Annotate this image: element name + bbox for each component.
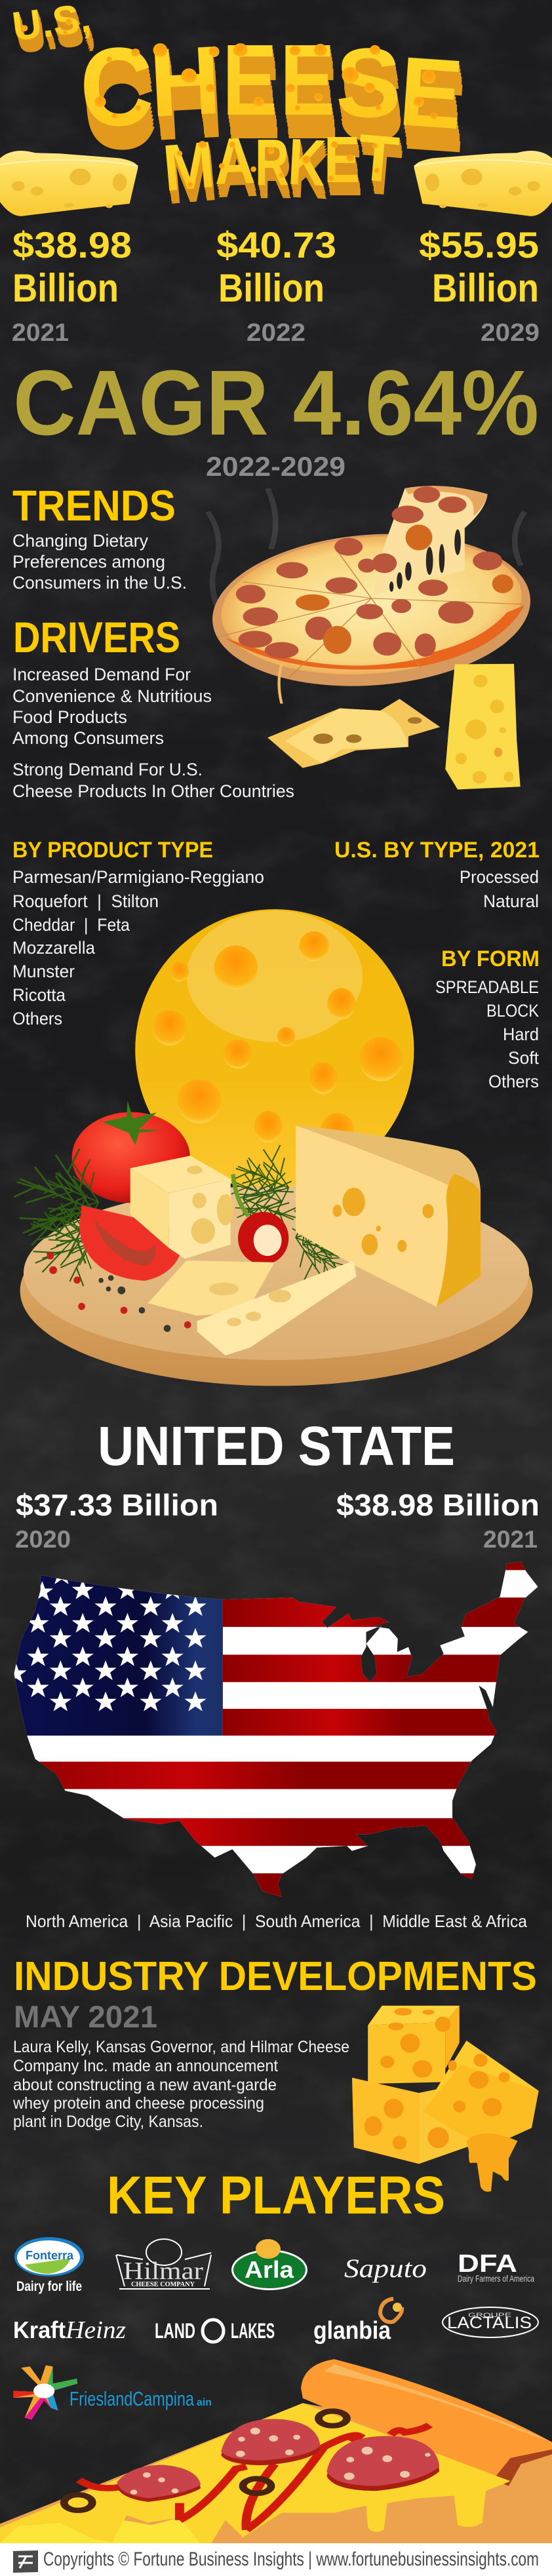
peppercorns [47,1253,191,1332]
panel: by form: SPREADABLE [435,977,539,997]
stat: U.S. 2020 [15,1488,218,1553]
illustration: cheese board [14,909,532,1386]
logo: glanbia: glanbia [313,2317,391,2345]
panel: by product type: Roquefort | Stilton [12,891,159,911]
title line: MARKET: K [286,125,328,200]
logo: Saputo: Saputo [344,2254,427,2283]
olives [64,2411,347,2510]
top cube [368,2006,460,2084]
cheese wedge large [296,1125,481,1307]
panel: by form [435,946,540,1091]
red sauce drizzle [79,2425,429,2530]
panel: industry developments: INDUSTRY DEVELOPMENTS [14,1954,537,1999]
panel: by form: Hard [503,1025,539,1044]
title line: MARKET: M [160,128,218,205]
stat: U.S. 2021: 2021 [483,1526,538,1553]
panel: industry developments: plant in Dodge City, Kansas. [13,2113,203,2131]
icon: cheese wedge right [414,151,552,216]
panel: trends: TRENDS [12,481,176,530]
logo: FrieslandCampina: FrieslandCampina [69,2387,195,2410]
tilted cube [422,2040,539,2149]
panel: by product type: Ricotta [12,985,66,1005]
logo: DFA [458,2250,534,2284]
steam [208,488,524,617]
title line: MARKET: R [255,126,289,199]
panel: by product type: Munster [12,962,75,981]
footer [0,2543,552,2576]
heading: key players: KEY PLAYERS [107,2166,445,2225]
logo: KraftHeinz: Heinz [65,2316,126,2344]
stat: 2021 market size: $38.98 [12,224,132,265]
logo: Land O Lakes [155,2319,275,2343]
panel: drivers: DRIVERS [13,613,180,661]
title line: CHEESE: H [147,26,224,138]
cheese slices on board [148,1260,356,1356]
panel: by product type: Parmesan/Parmigiano-Reggiano [12,867,264,887]
logo: Hilmar Cheese Company: Hilmar [123,2257,203,2285]
logo: FrieslandCampina: ain [197,2397,212,2408]
logo: Land O Lakes: LAND [155,2319,195,2343]
cheese cube [130,1156,234,1259]
panel: by product type: BY PRODUCT TYPE [12,838,213,863]
title line: CHEESE: E [222,24,277,136]
stat: 2029 market size: 2029 [481,319,540,347]
logo: Arla [231,2239,307,2290]
icon: Fortune Business Insights logo [13,2550,38,2573]
panel: drivers [12,613,294,801]
logo: Fonterra [14,2237,84,2294]
stat: U.S. 2020: $37.33 Billion [16,1488,218,1522]
stat: U.S. 2021 [336,1488,540,1553]
melted cheese [0,2403,511,2543]
panel: U.S. by type 2021 [334,838,540,911]
logo: Lactalis: LACTALIS [447,2314,532,2332]
stat: 2029 market size [419,224,540,347]
tomato [72,1101,190,1203]
tomato wedge [79,1205,185,1281]
panel: by product type: Others [12,1009,62,1028]
regions list: North America | Asia Pacific | South America | Middle East & Africa [26,1911,528,1931]
wheel of cheese [135,909,414,1190]
panel: drivers: Increased Demand For [12,665,191,684]
logo: FrieslandCampina [13,2366,212,2419]
map: United States flag [0,1557,552,1904]
logo: DFA: DFA [458,2250,517,2278]
logo: KraftHeinz [13,2316,126,2344]
logo: Land O Lakes: LAKES [231,2319,275,2343]
bottom cube [352,2078,472,2164]
title line: MARKET [160,121,402,205]
panel: by product type: Cheddar | Feta [12,915,130,935]
salami slices [117,2419,439,2502]
pizza crust edge [301,2359,552,2486]
wooden board [20,1186,532,1386]
stat: 2022 market size: 2022 [246,319,306,347]
stat: U.S. 2021: $38.98 Billion [336,1488,540,1522]
panel: trends: Changing Dietary [12,531,148,551]
panel: trends: Consumers in the U.S. [12,573,187,593]
icon: cheese block [445,664,521,789]
icon: cheese slices [267,699,440,768]
pepperoni [236,486,513,659]
panel: drivers: Strong Demand For U.S. [12,760,203,779]
panel: by product type: Mozzarella [12,938,96,958]
illustration: pizza with cheese pull [194,486,549,703]
pizza base [194,518,549,702]
panel: by form: Soft [508,1048,539,1068]
panel: industry developments: whey protein and cheese processing [12,2094,264,2113]
title line: MARKET: E [324,123,360,197]
panel: trends: Preferences among [12,552,165,572]
title line: MARKET: A [213,124,256,199]
lifted slice [373,486,488,596]
panel: industry developments: Laura Kelly, Kansas Governor, and Hilmar Cheese [13,2038,349,2056]
panel: by form: BLOCK [486,1001,539,1021]
title line: CHEESE: S [336,28,401,138]
panel: industry developments: Company Inc. made an announcement [13,2057,278,2075]
stat: 2022 market size: $40.73 [216,224,336,265]
panel: U.S. by type 2021: Processed [460,867,539,887]
panel: industry developments: about constructing a new avant-garde [13,2076,277,2094]
logo: Fonterra: Fonterra [26,2249,74,2262]
panel: by form: Others [488,1072,539,1091]
CAGR headline: 2022-2029 [206,451,345,482]
title line: MARKET: T [355,121,402,197]
cheese holes on title letters [22,19,437,187]
stat: 2021 market size: 2021 [12,319,69,347]
panel: drivers: Cheese Products In Other Countries [12,781,294,801]
title: U.S. Cheese Market [10,0,466,205]
logo: glanbia [313,2299,402,2345]
logo: Arla: Arla [245,2256,294,2283]
stat: 2022 market size [216,224,336,347]
illustration: pizza slice [0,2359,552,2543]
panel: industry developments [12,1954,537,2131]
panel: industry developments: MAY 2021 [14,1999,157,2034]
logo: Hilmar Cheese Company: CHEESE COMPANY [131,2280,195,2288]
stat: 2021 market size: Billion [12,266,119,310]
logo: Lactalis [443,2307,538,2337]
stat: U.S. 2020: 2020 [15,1526,71,1553]
panel: U.S. by type 2021: Natural [483,891,539,911]
title line: CHEESE [78,24,466,151]
pizza base crust [0,2403,552,2543]
panel: by product type [12,838,264,1028]
cheese drip [467,2134,517,2192]
panel: drivers: Convenience & Nutritious [12,686,212,706]
panel: by form: BY FORM [441,946,540,971]
stat: 2022 market size: Billion [218,266,325,310]
icon: melting cheese cubes [352,2006,539,2192]
title line: CHEESE: C [78,24,155,151]
panel: drivers: Among Consumers [12,728,164,748]
panel: U.S. by type 2021: U.S. BY TYPE, 2021 [334,838,540,863]
title line: CHEESE: E [396,35,466,150]
logo: KraftHeinz: Kraft [13,2316,66,2343]
chili pepper [233,1174,288,1264]
icon: cheese wedge left [0,151,138,216]
stat: 2021 market size [12,224,132,347]
stat: 2029 market size: Billion [432,266,539,310]
title line: CHEESE: E [280,24,335,136]
logo: Hilmar Cheese Company [116,2239,211,2289]
logo: Fonterra: Dairy for life [16,2279,82,2294]
panel: drivers: Food Products [12,707,127,727]
stat: 2029 market size: $55.95 [419,224,539,265]
herbs [14,1145,368,1286]
logo: Lactalis: GROUPE [468,2312,511,2318]
heading: United State: UNITED STATE [98,1415,455,1477]
panel: trends [12,481,187,593]
